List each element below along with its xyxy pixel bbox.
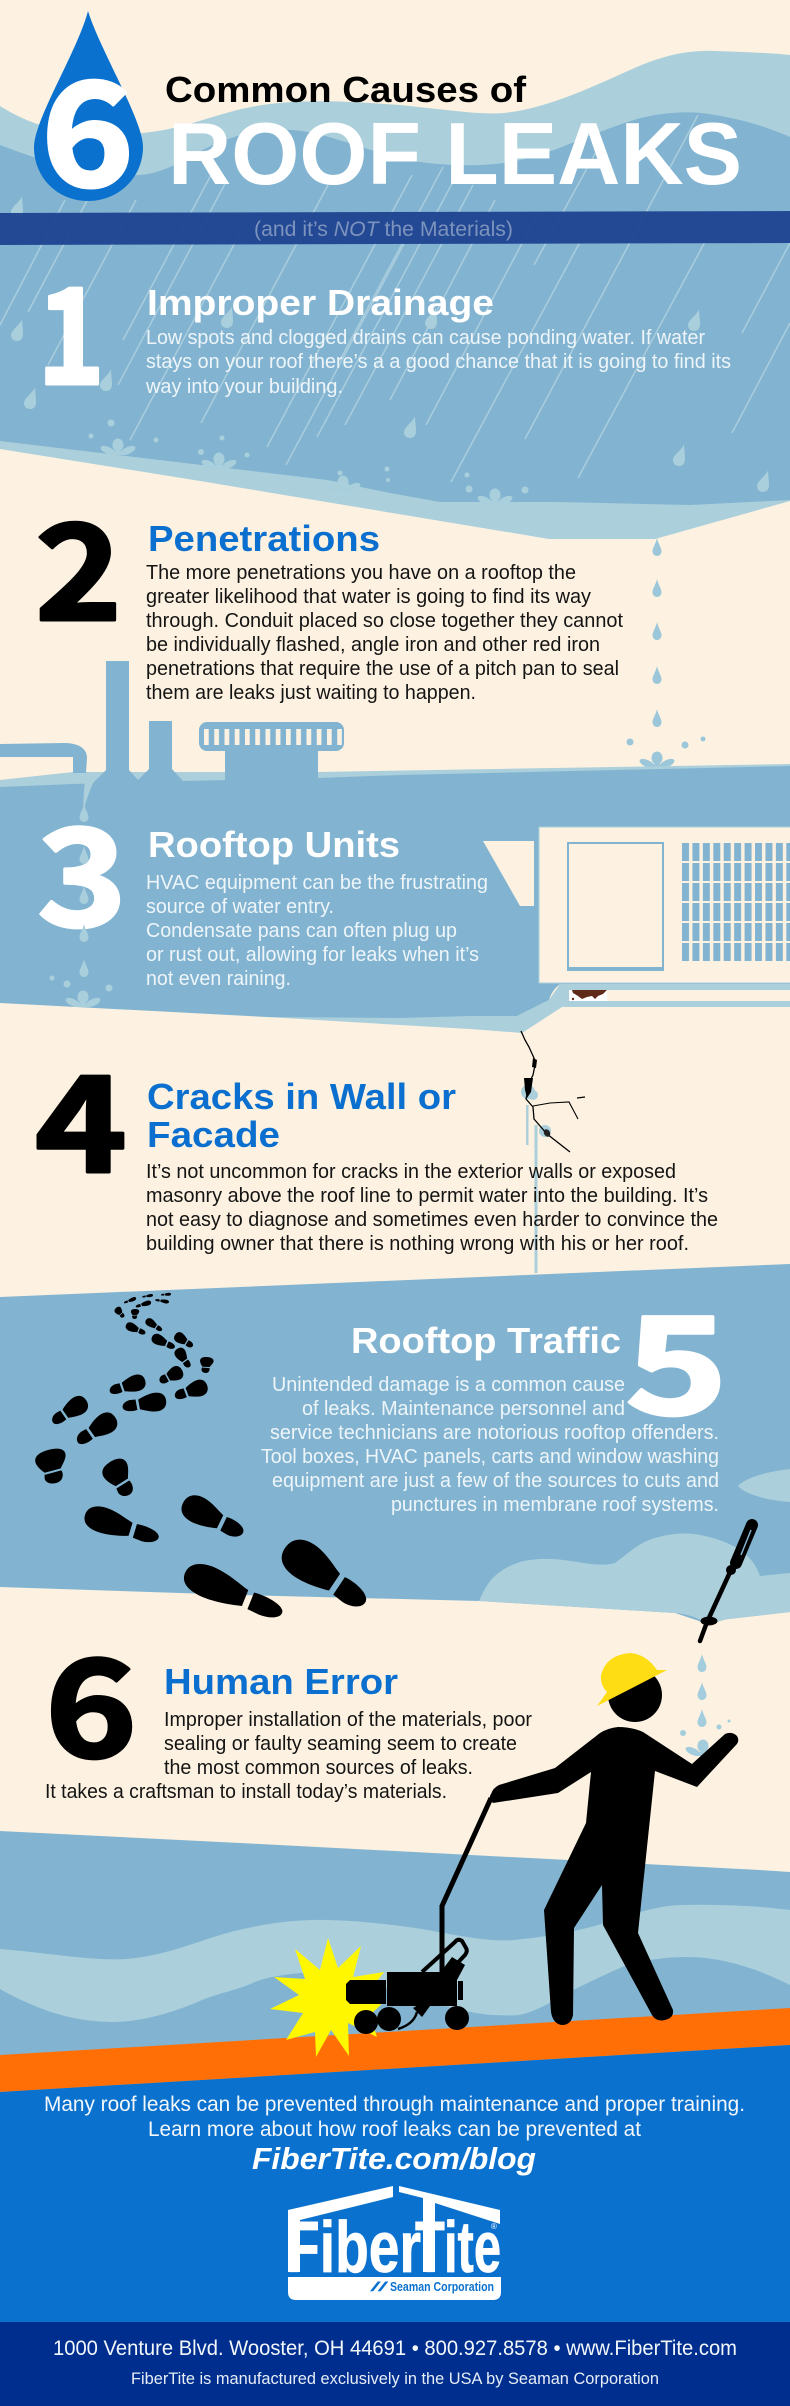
- body text: or rust out, allowing for leaks when it’s: [146, 943, 479, 966]
- heading: Human Error: [164, 1661, 398, 1702]
- heading: [147, 1076, 456, 1155]
- panel: header and improper drainage background: [0, 51, 790, 539]
- body text: [146, 561, 623, 704]
- panel: 5 rooftop traffic: [261, 1257, 728, 1516]
- body text: HVAC equipment can be the frustrating: [146, 871, 488, 894]
- heading: Improper Drainage: [147, 282, 494, 323]
- icon: hvac unit: [483, 827, 790, 1001]
- icon: dripping water: [626, 538, 706, 770]
- logo: FiberTite: [286, 2186, 501, 2300]
- body text: sealing or faulty seaming seem to create: [164, 1732, 517, 1755]
- figure: [490, 1727, 738, 2025]
- rain streaks: [0, 115, 790, 482]
- title: ROOF LEAKS: [168, 104, 742, 203]
- icon: screwdriver: [700, 1525, 752, 1641]
- body text: masonry above the roof line to permit water into the building. It’s: [146, 1184, 708, 1207]
- vent: [225, 745, 318, 785]
- panel: 3 rooftop units: [37, 769, 488, 1009]
- body text: of leaks. Maintenance personnel and: [302, 1397, 625, 1420]
- body text: Low spots and clogged drains can cause ponding water. If water: [146, 326, 705, 349]
- body text: [146, 1160, 718, 1255]
- icon: water drop with number 6: 6: [41, 20, 134, 228]
- body text: greater likelihood that water is going to find its way: [146, 585, 592, 608]
- heading: Cracks in Wall or: [147, 1076, 456, 1117]
- closing message: FiberTite.com/blog: [252, 2141, 536, 2176]
- logo: FiberTite: Seaman Corporation: [390, 2280, 494, 2294]
- heading: Facade: [147, 1114, 280, 1155]
- number 2: 2: [35, 467, 122, 659]
- closing message: Learn more about how roof leaks can be prevented at: [148, 2118, 641, 2141]
- body text: through. Conduit placed so close together they cannot: [146, 609, 623, 632]
- title: Common Causes of: [165, 69, 527, 110]
- body text: be individually flashed, angle iron and other red iron: [146, 633, 600, 656]
- subtitle band: [0, 211, 790, 245]
- icon: roof penetrations: [0, 661, 344, 810]
- logo: FiberTite: Tite: [415, 2208, 501, 2288]
- body text: Improper installation of the materials, poor: [164, 1708, 532, 1731]
- body text: It’s not uncommon for cracks in the exterior walls or exposed: [146, 1160, 676, 1183]
- icon: worker with roof cart: [346, 1653, 738, 2034]
- stacks: [93, 661, 183, 790]
- panel: rooftop units background: [0, 764, 790, 1033]
- body text: stays on your roof there’s a a good chance that it is going to find its: [146, 350, 731, 373]
- body text: Condensate pans can often plug up: [146, 919, 457, 942]
- body text: the most common sources of leaks.: [164, 1756, 473, 1779]
- body text: Tool boxes, HVAC panels, carts and window washing: [261, 1445, 719, 1468]
- icon: footprints trail: [33, 1293, 376, 1627]
- body text: [145, 326, 731, 398]
- icon: dripping water: [50, 804, 112, 1009]
- heading: Rooftop Units: [148, 824, 400, 865]
- number 4: 4: [35, 1019, 127, 1211]
- pipe drip: [83, 773, 94, 810]
- body text: way into your building.: [145, 375, 343, 398]
- body text: service technicians are notorious rooftop offenders.: [270, 1421, 719, 1444]
- subtitle band: (and it’s NOT the Materials): [254, 218, 513, 241]
- body text: not easy to diagnose and sometimes even harder to convince the: [146, 1208, 718, 1231]
- body text: [45, 1708, 532, 1803]
- orange roof edge: [0, 2008, 790, 2092]
- panel: 2 penetrations: [35, 467, 706, 770]
- panel: rooftop traffic background: [0, 1264, 790, 1623]
- number 1: 1: [37, 231, 105, 423]
- hard hat: [597, 1653, 667, 1706]
- blue footer panel: [0, 2045, 790, 2322]
- conduit pipe: [0, 743, 87, 773]
- logo: FiberTite: Fiber: [286, 2208, 421, 2288]
- body text: The more penetrations you have on a rooftop the: [146, 561, 576, 584]
- logo: FiberTite: ®: [491, 2222, 497, 2231]
- body text: source of water entry.: [146, 895, 334, 918]
- closing message: [44, 2093, 745, 2176]
- number 5: 5: [625, 1257, 728, 1453]
- body text: [146, 871, 488, 990]
- rain drops and splashes: [11, 196, 769, 507]
- body text: penetrations that require the use of a pitch pan to seal: [146, 657, 619, 680]
- panel: 6 human error: [45, 1600, 532, 1803]
- body text: [261, 1373, 719, 1516]
- body text: It takes a craftsman to install today’s materials.: [45, 1780, 447, 1803]
- footer band: 1000 Venture Blvd. Wooster, OH 44691 • 800.927.8578 • www.FiberTite.com: [53, 2337, 737, 2360]
- body text: them are leaks just waiting to happen.: [146, 681, 476, 704]
- number 6: 6: [45, 1600, 137, 1796]
- cart: [346, 1798, 491, 2034]
- icon: wall crack: [521, 1031, 585, 1273]
- panel: 1 improper drainage: [37, 231, 731, 423]
- body text: not even raining.: [146, 967, 291, 990]
- icon: leak drops by worker hand: [680, 1654, 730, 1758]
- body text: building owner that there is nothing wrong with his or her roof.: [146, 1232, 689, 1255]
- heading: Rooftop Traffic: [351, 1320, 621, 1361]
- body text: punctures in membrane roof systems.: [391, 1493, 719, 1516]
- panel: 4 cracks in wall or facade: [35, 1019, 718, 1273]
- body text: equipment are just a few of the sources to cuts and: [272, 1469, 719, 1492]
- heading: Penetrations: [148, 518, 380, 559]
- footer band: [0, 2322, 790, 2406]
- closing message: Many roof leaks can be prevented through maintenance and proper training.: [44, 2093, 745, 2116]
- icon: yellow starburst: [270, 1938, 386, 2057]
- footer band: FiberTite is manufactured exclusively in the USA by Seaman Corporation: [131, 2370, 659, 2388]
- panel: bottom roof waves: [0, 1831, 790, 2092]
- logo: FiberTite: //: [369, 2280, 389, 2294]
- body text: Unintended damage is a common cause: [272, 1373, 625, 1396]
- number 3: 3: [37, 769, 127, 965]
- cream rail and rust: [569, 990, 790, 1001]
